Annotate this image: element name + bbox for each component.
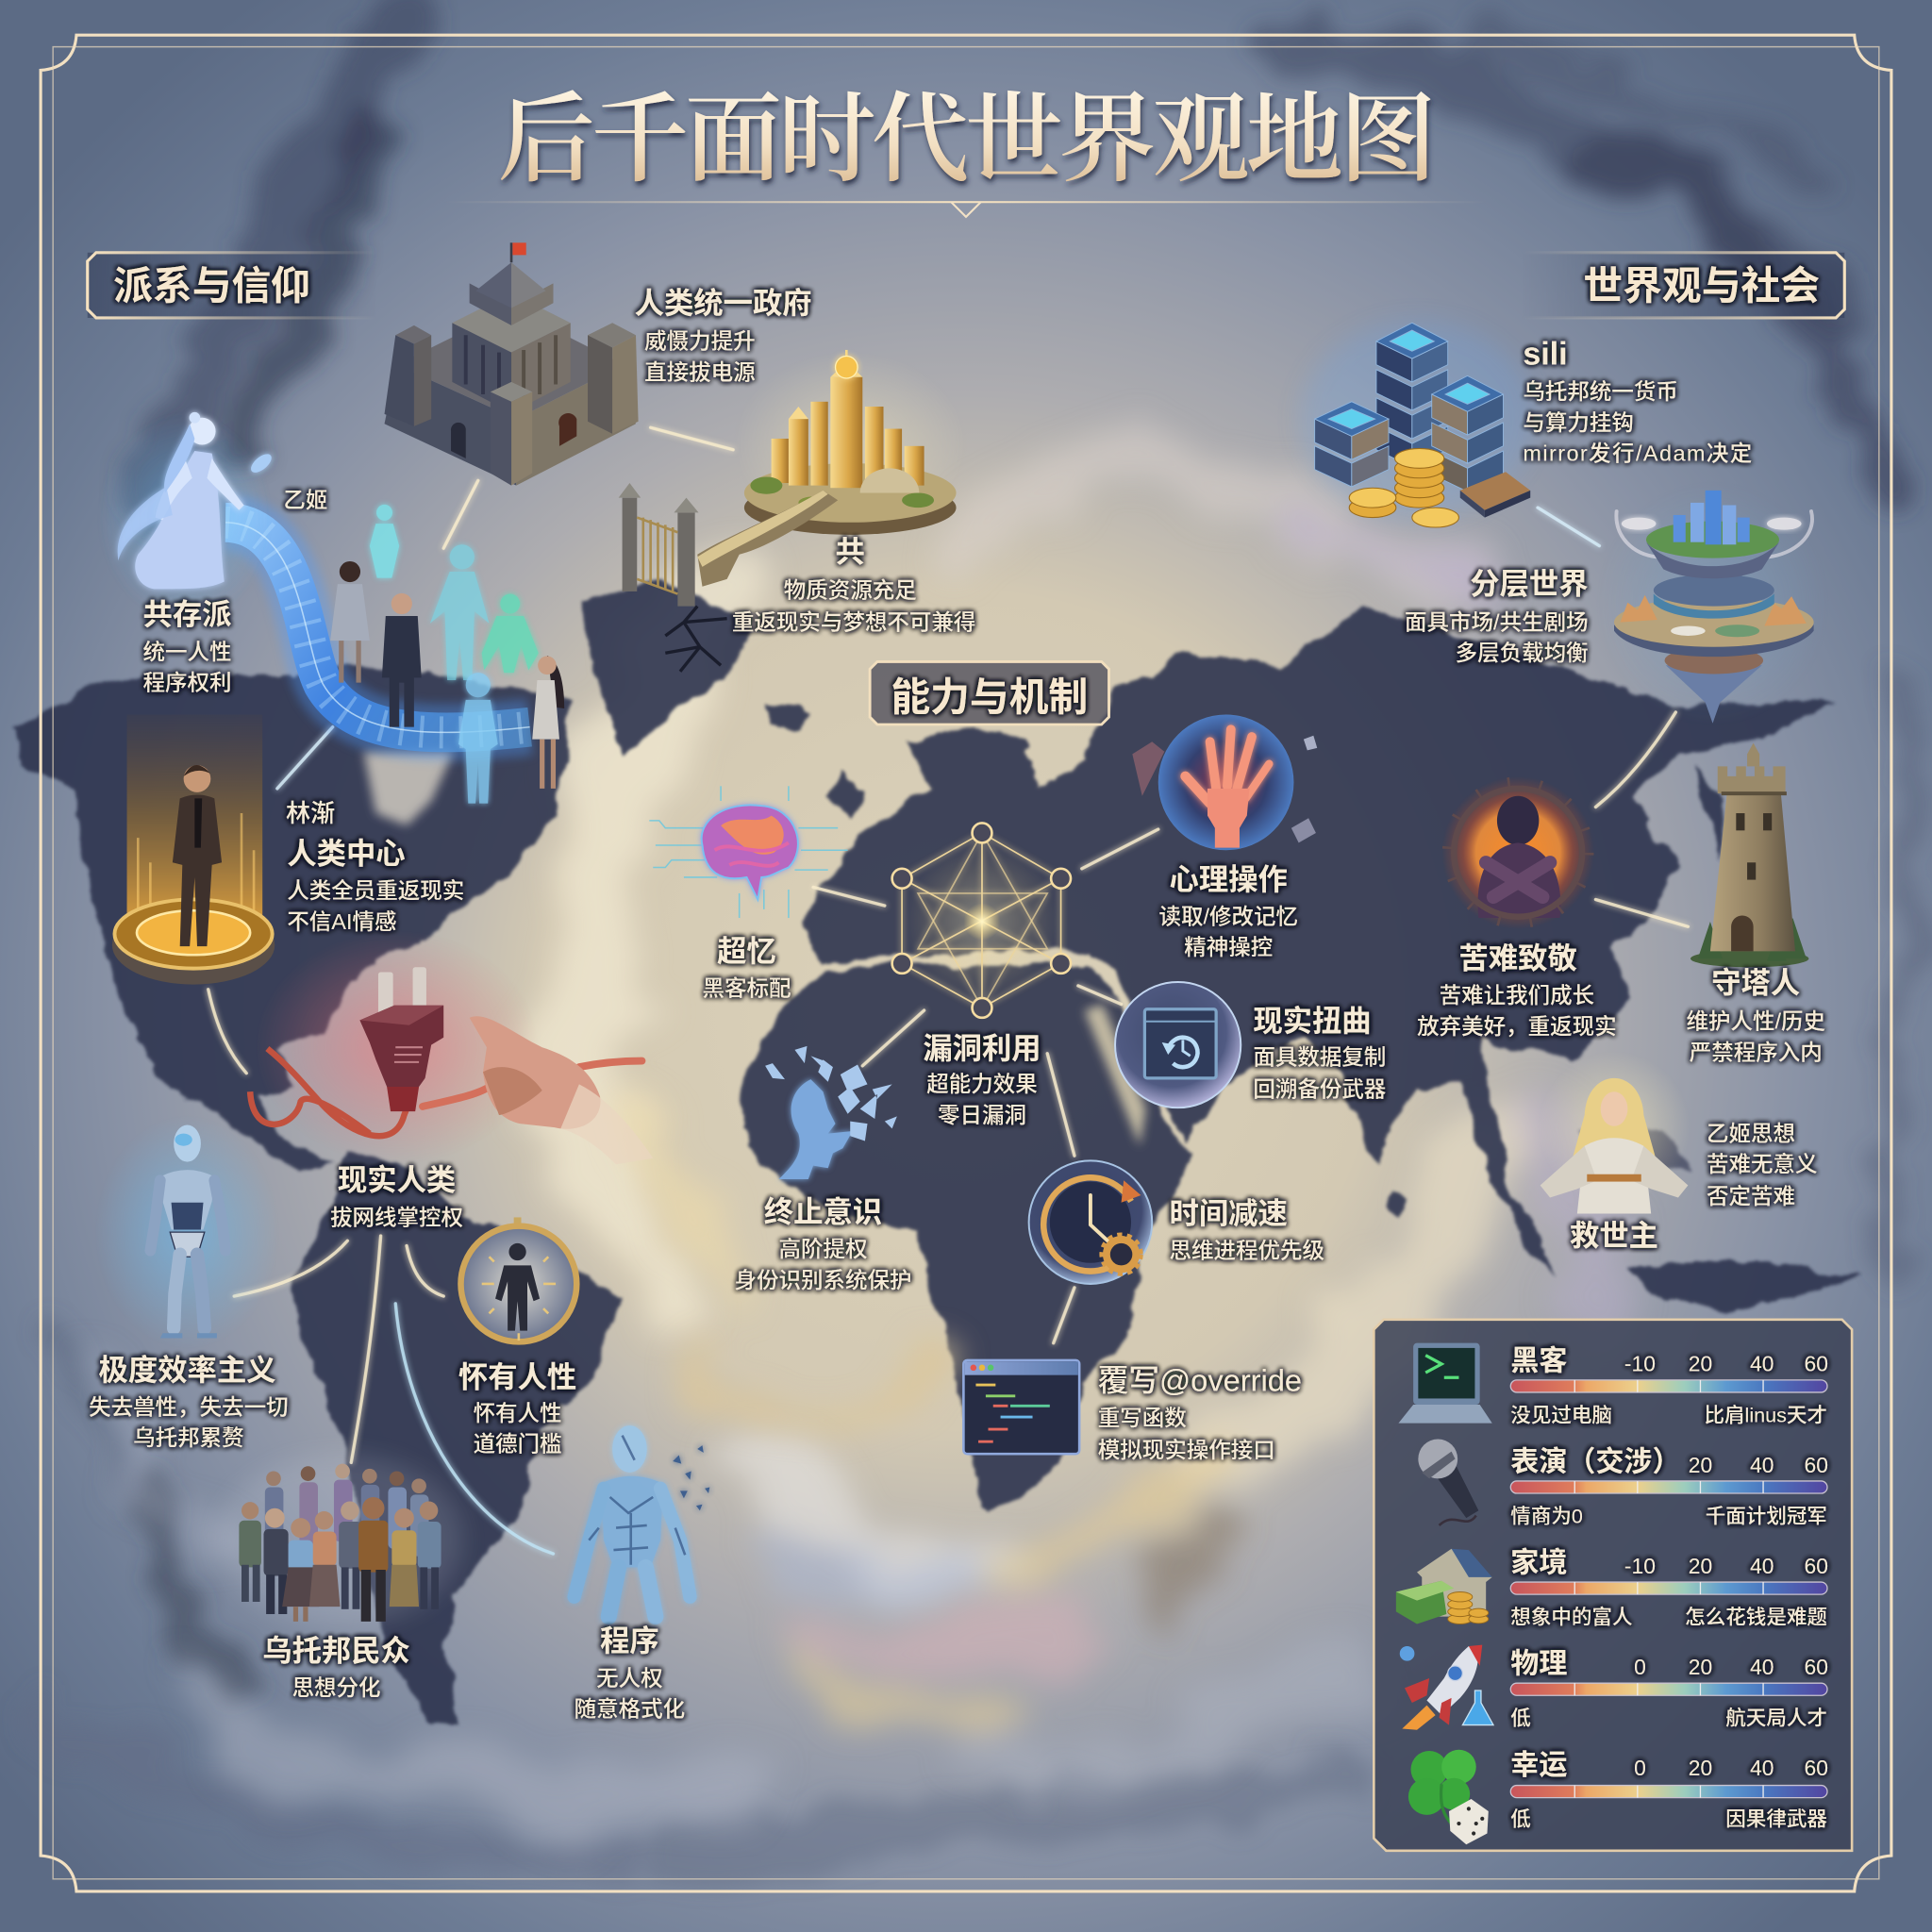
label: 乙姬思想 (1707, 1121, 1817, 1208)
label: 时间减速: 思维进程优先级 (1170, 1239, 1324, 1263)
label: 覆写@override: 重写函数 (1098, 1406, 1187, 1430)
icon: golden city island (733, 350, 967, 536)
label: 苦难致敬: 苦难让我们成长 (1440, 983, 1594, 1008)
label: 共: 物质资源充足 (784, 577, 917, 602)
label: 漏洞利用: 超能力效果 (926, 1072, 1038, 1096)
label: 怀有人性: 道德门槛 (474, 1432, 562, 1457)
icon: brain with circuits (649, 786, 848, 918)
row: 表演（交涉）: 60 (1805, 1453, 1828, 1477)
row: 幸运: 40 (1750, 1756, 1774, 1780)
row: 表演（交涉） (1510, 1447, 1828, 1527)
label: 乙姬思想: 乙姬思想 (1707, 1121, 1795, 1145)
label: sili: 乌托邦统一货币 (1523, 379, 1678, 404)
label: 程序: 无人权 (596, 1666, 663, 1690)
row: 家境: 想象中的富人 (1510, 1605, 1633, 1628)
row: 表演（交涉）: 40 (1750, 1453, 1774, 1477)
icon: rocket and flask (1400, 1645, 1493, 1730)
row: 物理: 低 (1510, 1707, 1531, 1730)
row: 家境: -10 (1624, 1554, 1656, 1578)
icon: savior in white robe (1538, 1051, 1690, 1214)
label: 救世主: 救世主 (1570, 1219, 1658, 1252)
row: 黑客: -10 (1624, 1352, 1656, 1376)
row: 家境: 20 (1689, 1554, 1712, 1578)
row: 家境: 家境 (1510, 1548, 1567, 1579)
label: 守塔人: 严禁程序入内 (1690, 1040, 1823, 1064)
row: 幸运: 20 (1689, 1756, 1712, 1780)
section heading: 能力与机制 (870, 661, 1109, 724)
label: sili: sili (1523, 337, 1568, 373)
label: 分层世界 (1405, 568, 1589, 665)
label: 林渐 人类中心: 人类全员重返现实 (287, 878, 464, 903)
label: 分层世界: 多层负载均衡 (1456, 641, 1589, 665)
connector lines (208, 427, 1688, 1554)
label: 人类统一政府: 人类统一政府 (635, 287, 812, 320)
label: 超忆 (703, 935, 791, 1000)
label: 心理操作: 读取/修改记忆 (1158, 905, 1298, 929)
label: 怀有人性: 怀有人性 (474, 1401, 562, 1425)
row: 黑客: 黑客 (1510, 1345, 1567, 1376)
label: 分层世界: 面具市场/共生剧场 (1405, 609, 1589, 634)
label: 共存派: 程序权利 (143, 670, 232, 694)
row: 物理: 60 (1805, 1655, 1828, 1679)
label: 守塔人 (1686, 967, 1825, 1064)
label: 超忆: 超忆 (717, 935, 776, 968)
section heading: 派系与信仰: 派系与信仰 (113, 263, 310, 308)
row: 黑客: 20 (1689, 1352, 1712, 1376)
row: 物理: 20 (1689, 1655, 1712, 1679)
label: 极度效率主义: 极度效率主义 (99, 1354, 276, 1387)
label: 现实扭曲: 回溯备份武器 (1253, 1076, 1386, 1101)
label: 心理操作 (1158, 863, 1298, 959)
label: 怀有人性 (458, 1361, 576, 1457)
icon: code window (963, 1360, 1079, 1454)
label: 乌托邦民众 (262, 1635, 410, 1700)
label: 程序 (575, 1624, 685, 1721)
icon: government fortress (385, 242, 639, 486)
label: 怀有人性: 怀有人性 (458, 1361, 576, 1394)
section heading: 世界观与社会: 世界观与社会 (1583, 263, 1820, 308)
icon: data stream between Otohime and people (225, 523, 530, 732)
icon: golden network polyhedron (892, 823, 1071, 1018)
label: 乌托邦民众: 乌托邦民众 (262, 1635, 410, 1668)
icon: broken gate and bridge (619, 483, 838, 672)
icon: servers and gold coins (1300, 321, 1534, 527)
row: 物理: 40 (1750, 1655, 1774, 1679)
section heading: 能力与机制: 能力与机制 (891, 675, 1088, 720)
label: 程序: 随意格式化 (575, 1696, 685, 1721)
label: 共 (732, 536, 975, 634)
label: 林渐 人类中心: 不信AI情感 (287, 909, 397, 934)
land shapes (12, 665, 575, 1171)
label: sili (1523, 337, 1752, 465)
label: 漏洞利用: 零日漏洞 (938, 1103, 1026, 1127)
label: 分层世界: 分层世界 (1470, 568, 1589, 601)
label: 共存派 (143, 598, 232, 694)
section heading: 派系与信仰 (88, 253, 377, 318)
label: 覆写@override: 模拟现实操作接口 (1098, 1438, 1275, 1462)
label: 共: 共 (836, 536, 865, 569)
label: 极度效率主义: 失去兽性，失去一切 (89, 1394, 289, 1419)
label: 漏洞利用: 漏洞利用 (923, 1032, 1041, 1065)
label: 苦难致敬: 苦难致敬 (1458, 942, 1577, 975)
label: 守塔人: 维护人性/历史 (1686, 1009, 1825, 1034)
label: sili: mirror发行/Adam决定 (1523, 441, 1752, 465)
label: 人类统一政府 (635, 287, 812, 384)
icon: shattered head (765, 1046, 897, 1179)
label: 极度效率主义: 乌托邦累赘 (133, 1425, 244, 1450)
row: 幸运: 幸运 (1510, 1750, 1567, 1781)
row: 幸运: 因果律武器 (1725, 1807, 1827, 1831)
icon: watchtower (1690, 743, 1808, 967)
label: 终止意识: 终止意识 (764, 1196, 882, 1229)
panel: attribute legend (1374, 1320, 1852, 1851)
label: 覆写@override (1098, 1363, 1302, 1462)
icon: hand in psychic bubble (1132, 715, 1317, 850)
row: 家境: 40 (1750, 1554, 1774, 1578)
icon: reality distortion bubble with undo window (1115, 982, 1241, 1108)
label: 时间减速 (1170, 1197, 1324, 1263)
label: 守塔人: 守塔人 (1711, 967, 1800, 1000)
row: 物理 (1510, 1649, 1828, 1730)
label: 林渐 人类中心 (286, 799, 464, 934)
label: 苦难致敬: 放弃美好，重返现实 (1417, 1014, 1617, 1039)
row: 黑客: 60 (1805, 1352, 1828, 1376)
icon: red plug and hand pulling cable (250, 930, 653, 1164)
row: 物理: 0 (1634, 1655, 1646, 1679)
icon: suffering figure in thorn ring (1441, 776, 1594, 929)
label: 现实人类: 拔网线掌控权 (330, 1205, 463, 1229)
row: 表演（交涉）: 20 (1689, 1453, 1712, 1477)
row: 黑客: 40 (1750, 1352, 1774, 1376)
icon: Otohime spirit woman (98, 412, 275, 623)
label: 覆写@override: 覆写@override (1098, 1363, 1302, 1398)
row: 幸运: 60 (1805, 1756, 1828, 1780)
row: 黑客: 比肩linus天才 (1704, 1403, 1827, 1426)
label: 终止意识: 高阶提权 (778, 1237, 867, 1261)
icon: laptop terminal (1398, 1343, 1492, 1424)
label: 超忆: 黑客标配 (703, 975, 791, 1000)
label: 人类统一政府: 威慑力提升 (644, 329, 756, 354)
label: 共存派: 共存派 (143, 598, 232, 631)
label: 程序: 程序 (600, 1624, 659, 1657)
icon: clover and dice (1408, 1750, 1489, 1844)
label: 极度效率主义 (89, 1354, 289, 1450)
row: 表演（交涉）: 情商为0 (1510, 1504, 1583, 1527)
row: 物理: 物理 (1510, 1649, 1567, 1680)
label: 共存派: 统一人性 (143, 640, 232, 664)
row: 黑客 (1510, 1345, 1828, 1426)
row: 表演（交涉）: 表演（交涉） (1510, 1447, 1680, 1478)
row: 家境: 60 (1805, 1554, 1828, 1578)
title: 后千面时代世界观地图 (498, 87, 1437, 194)
icon: clock with gear (1029, 1160, 1152, 1284)
label: 现实人类 (330, 1164, 463, 1229)
row: 表演（交涉）: 千面计划冠军 (1706, 1504, 1827, 1527)
row: 幸运: 0 (1634, 1756, 1646, 1780)
label: 乌托邦民众: 思想分化 (292, 1675, 381, 1700)
icon: crystal program figure (575, 1425, 709, 1617)
row: 黑客: 没见过电脑 (1510, 1403, 1612, 1426)
section heading: 世界观与社会 (1522, 253, 1844, 318)
label: 乙姬思想: 苦难无意义 (1707, 1152, 1817, 1176)
light bays in the land (363, 752, 1146, 1146)
label: sili: 与算力挂钩 (1523, 410, 1634, 435)
label: 心理操作: 心理操作 (1170, 863, 1288, 896)
row: 幸运 (1510, 1750, 1828, 1831)
row: 幸运: 低 (1510, 1807, 1531, 1831)
label: 苦难致敬 (1417, 942, 1617, 1039)
row: 家境 (1510, 1548, 1828, 1628)
label: 共: 重返现实与梦想不可兼得 (732, 609, 975, 634)
label: 现实扭曲 (1253, 1005, 1386, 1101)
icon: human and ghost figures on stream (330, 505, 564, 804)
icon: layered floating world (1595, 480, 1830, 727)
label: 时间减速: 时间减速 (1170, 1197, 1288, 1230)
icon: house money and coins (1396, 1549, 1492, 1624)
row: 家境: 怎么花钱是难题 (1685, 1605, 1827, 1628)
label: 漏洞利用 (923, 1032, 1041, 1127)
label: 现实扭曲: 现实扭曲 (1253, 1005, 1372, 1038)
label: 终止意识: 身份识别系统保护 (734, 1268, 911, 1292)
label: 人类统一政府: 直接拔电源 (644, 359, 756, 384)
row: 物理: 航天局人才 (1725, 1707, 1827, 1730)
label: 现实扭曲: 面具数据复制 (1253, 1044, 1386, 1069)
title underline with chevron (443, 201, 1489, 217)
icon: microphone (1418, 1440, 1478, 1525)
icon: silver robot (95, 1115, 279, 1349)
icon: compass with human silhouette (460, 1217, 576, 1341)
label: 林渐 人类中心: 林渐 (286, 799, 335, 827)
label: 乙姬思想: 否定苦难 (1707, 1184, 1795, 1208)
icon: Lin Che in golden cylinder (112, 715, 275, 985)
label: 现实人类: 现实人类 (338, 1164, 456, 1197)
label: 乙姬: 乙姬 (283, 488, 327, 512)
label: 终止意识 (734, 1196, 911, 1292)
label: 林渐 人类中心: 人类中心 (287, 838, 406, 871)
label: 心理操作: 精神操控 (1184, 935, 1273, 959)
icon: crowd of utopia citizens (217, 1454, 463, 1626)
